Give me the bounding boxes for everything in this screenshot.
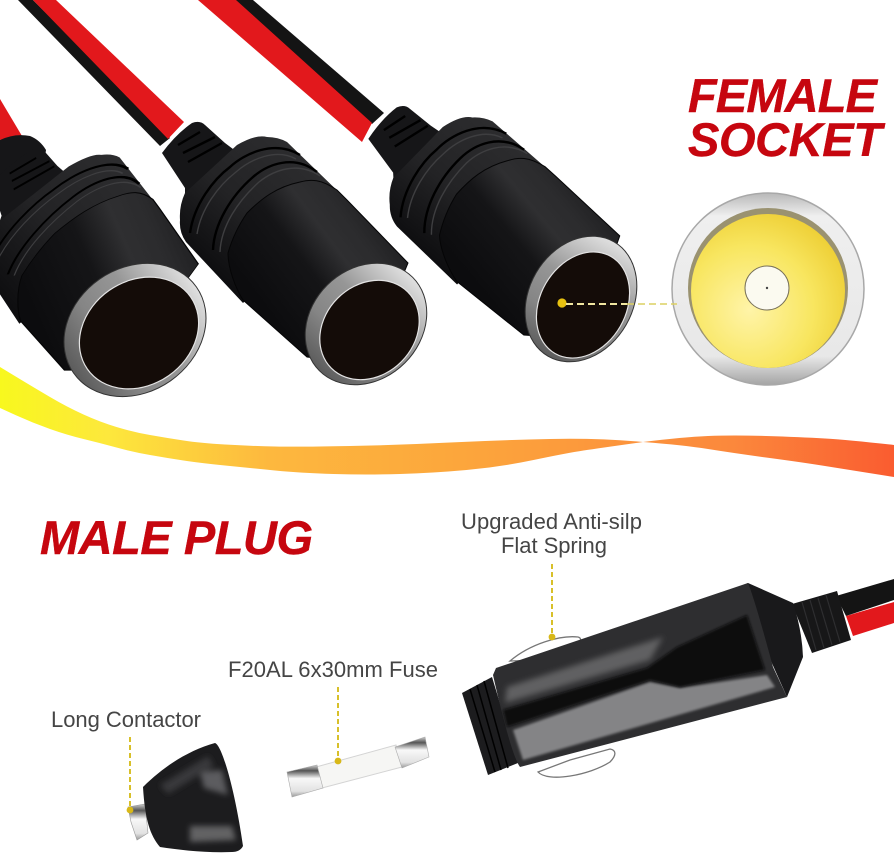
label: flat spring — [461, 509, 642, 558]
label: fuse: F20AL 6x30mm Fuse — [228, 657, 438, 682]
yellow floor — [691, 214, 845, 368]
female socket: right — [367, 95, 659, 382]
callout: spring — [549, 564, 555, 640]
plug springs — [510, 637, 615, 777]
metal ring — [503, 216, 659, 382]
centre contact — [745, 266, 789, 310]
label: flat spring: Flat Spring — [501, 533, 607, 558]
female socket: left — [0, 123, 248, 424]
heading: female socket: SOCKET — [688, 113, 886, 166]
socket body — [162, 122, 408, 364]
fuse — [287, 737, 429, 797]
heading: female socket: FEMALE — [688, 69, 879, 122]
wires of the female sockets — [0, 0, 384, 146]
socket body — [367, 95, 625, 350]
metal ring — [280, 238, 452, 410]
wire: middle socket — [18, 0, 184, 146]
plug rear cone — [738, 583, 803, 697]
silver rim — [672, 193, 864, 385]
female socket: middle — [162, 122, 452, 410]
plug thread — [462, 677, 518, 775]
fuse glass — [316, 745, 402, 788]
heading: female socket — [688, 69, 886, 166]
plug wires — [836, 579, 894, 636]
label: long contactor: Long Contactor — [51, 707, 201, 732]
label: flat spring: Upgraded Anti-silp — [461, 509, 642, 534]
fuse cap right — [395, 737, 429, 768]
callout: contactor — [127, 737, 133, 813]
fuse cap left — [287, 765, 323, 797]
callout: socket to close-up — [557, 298, 677, 308]
contact tip — [128, 804, 148, 840]
cap highlights — [160, 756, 236, 842]
wire: right socket — [198, 0, 384, 142]
metal ring — [38, 236, 232, 424]
opening — [299, 260, 440, 400]
inner wall shadow — [688, 208, 848, 368]
socket interior close-up — [672, 193, 864, 385]
plug body — [493, 583, 787, 767]
wave ribbon divider — [0, 367, 894, 477]
opening — [58, 254, 220, 412]
socket body — [0, 123, 248, 394]
wire: left socket — [0, 99, 22, 140]
plug strain relief — [792, 591, 851, 653]
heading: male plug: MALE PLUG — [40, 511, 313, 564]
long contactor cap — [128, 743, 243, 852]
black cap — [143, 743, 243, 852]
plug highlights — [503, 615, 775, 760]
opening — [518, 235, 648, 375]
callout: fuse — [335, 687, 341, 764]
strain relief — [0, 135, 46, 210]
male plug assembly — [462, 579, 894, 777]
